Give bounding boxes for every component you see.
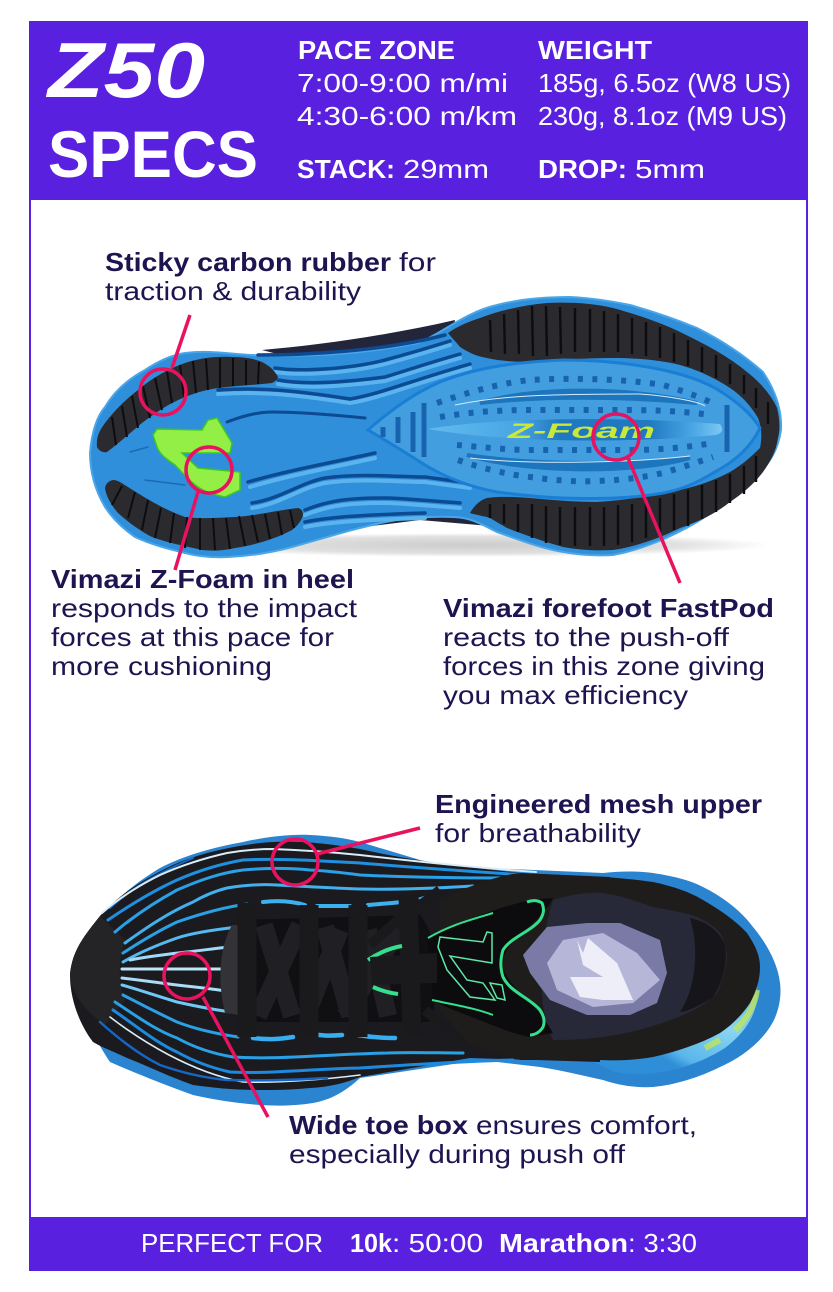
wide toe box callout text: ensures comfort,: [476, 1110, 697, 1140]
z-foam heel callout text: forces at this pace for: [51, 622, 334, 652]
knit stripes: [100, 849, 540, 1082]
footer banner: : 50:00: [392, 1228, 483, 1258]
forefoot fastpod callout text: you max efficiency: [443, 680, 688, 710]
weight specs: 185g, 6.5oz (W8 US): [538, 68, 791, 98]
header banner: [29, 21, 808, 200]
stack height: 29mm: [403, 154, 489, 184]
heel rubber outsole pads: [97, 357, 303, 551]
weight specs: 230g, 8.1oz (M9 US): [538, 101, 787, 131]
weight specs: WEIGHT: [538, 35, 652, 65]
callout marker: z-foam heel: [175, 447, 232, 570]
title: Z50: [46, 26, 205, 114]
engineered mesh callout text: for breathability: [435, 818, 641, 848]
forefoot fastpod callout text: [443, 593, 774, 710]
callout marker: mesh upper: [272, 828, 420, 885]
wide toe box callout text: Wide toe box: [289, 1110, 469, 1140]
title: SPECS: [48, 117, 258, 191]
forefoot FastPod: [368, 360, 760, 498]
sticky carbon rubber callout text: traction & durability: [105, 276, 361, 306]
stack height: [297, 154, 489, 184]
pace zone specs: [297, 35, 517, 131]
sticky carbon rubber callout text: for: [399, 247, 436, 277]
z-foam heel callout text: more cushioning: [51, 651, 272, 681]
footer banner: : 3:30: [628, 1228, 697, 1258]
forefoot fastpod callout text: Vimazi forefoot FastPod: [443, 593, 774, 623]
Z-Foam wordmark: Z-Foam: [506, 420, 655, 443]
forefoot fastpod callout text: reacts to the push-off: [443, 622, 730, 652]
shoe sole illustration: [90, 297, 781, 557]
heel drop: DROP:: [538, 154, 627, 184]
pace zone specs: 7:00-9:00 m/mi: [297, 68, 508, 98]
heel drop: 5mm: [635, 154, 705, 184]
pace zone specs: 4:30-6:00 m/km: [297, 101, 517, 131]
footer banner: Marathon: [499, 1228, 628, 1258]
pace zone specs: PACE ZONE: [298, 35, 455, 65]
collar and heel: [440, 873, 760, 1060]
z-foam heel callout text: [51, 564, 358, 681]
forefoot rubber outsole pad: [448, 303, 779, 550]
laces: [220, 890, 465, 1045]
callout marker: toe box: [164, 953, 268, 1117]
z-foam heel callout text: responds to the impact: [51, 593, 358, 623]
shoe top view illustration: [70, 835, 781, 1106]
footer banner: [29, 1217, 808, 1271]
sticky carbon rubber callout text: [105, 247, 436, 306]
callout marker: sticky rubber: [140, 315, 190, 415]
tongue with green trim: [368, 898, 553, 1037]
sole flex grooves: [130, 335, 470, 527]
engineered mesh callout text: Engineered mesh upper: [435, 789, 762, 819]
weight specs: [538, 35, 791, 131]
toe cap: [70, 916, 125, 1025]
engineered mesh callout text: [435, 789, 762, 848]
black knit upper: [70, 842, 610, 1090]
sticky carbon rubber callout text: Sticky carbon rubber: [105, 247, 391, 277]
insole logo: [523, 923, 667, 1015]
title: [46, 26, 258, 191]
stack height: STACK:: [297, 154, 395, 184]
wide toe box callout text: [289, 1110, 697, 1169]
blue midsole rim: [70, 835, 781, 1106]
footer banner: 10k: [350, 1228, 393, 1258]
insole: [541, 893, 727, 1040]
wide toe box callout text: especially during push off: [289, 1139, 626, 1169]
forefoot fastpod callout text: forces in this zone giving: [443, 651, 765, 681]
heel drop: [538, 154, 705, 184]
z-foam heel callout text: Vimazi Z-Foam in heel: [51, 564, 354, 594]
footer banner: PERFECT FOR: [141, 1228, 323, 1258]
callout marker: fastpod: [593, 414, 680, 583]
green heel logo: [153, 418, 240, 497]
